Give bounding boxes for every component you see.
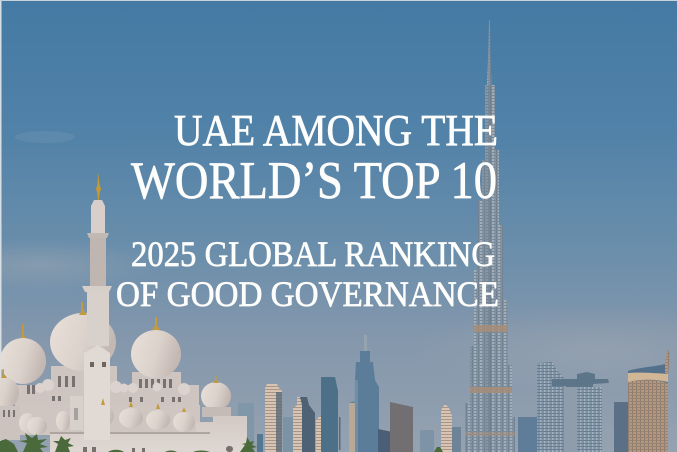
- lower arches wall: [20, 405, 200, 435]
- palm trees: [0, 433, 443, 452]
- title: UAE among the world's top 10: UAE AMONG THE: [174, 106, 498, 155]
- skyline: sky bridge towers and tan tower: [518, 348, 670, 452]
- title: UAE among the world's top 10: [131, 106, 498, 210]
- Burj Khalifa tower: [465, 20, 515, 452]
- mosque: [0, 172, 247, 452]
- small rooftop domes: [35, 379, 190, 395]
- tower with spire: [349, 335, 379, 452]
- base wall: [50, 416, 247, 452]
- minaret: [70, 172, 112, 440]
- subtitle: 2025 global ranking of good governance: OF GOOD GOVERNANCE: [116, 274, 499, 314]
- dome: left: [0, 324, 46, 384]
- doors: [83, 446, 233, 452]
- lower domes: [19, 405, 195, 435]
- dome: large: [50, 302, 116, 371]
- gold finials: [1, 309, 219, 412]
- dome: right: [131, 317, 181, 378]
- subtitle: 2025 global ranking of good governance: 2025 GLOBAL RANKING: [131, 234, 495, 274]
- dome: small right: [201, 376, 231, 417]
- title: UAE among the world's top 10: WORLD’S TOP 10: [131, 152, 497, 210]
- dome: far left: [0, 369, 20, 440]
- subtitle: 2025 global ranking of good governance: [116, 234, 499, 314]
- back arcades: [15, 366, 199, 410]
- window bands: [3, 376, 181, 417]
- skyline: Dubai towers: [238, 335, 461, 452]
